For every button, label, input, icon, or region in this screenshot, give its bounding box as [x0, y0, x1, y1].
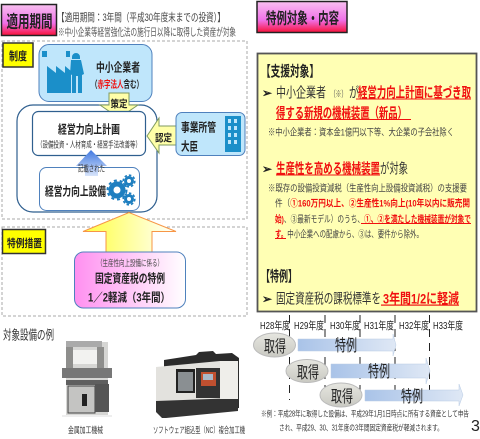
icon: gears: [108, 175, 135, 205]
row 1: acquisition and special case: 取得: [264, 337, 286, 356]
heading: application period: [2, 4, 56, 36]
text block: productivity machinery: ➢: [262, 162, 273, 176]
year labels: H31年度: [364, 319, 394, 332]
text block: target SMEs: （※）: [330, 89, 347, 99]
row 1: acquisition and special case: [254, 333, 396, 357]
arrow: certified: 認定: [155, 132, 172, 144]
outer frame: plan and equipment: [17, 105, 157, 212]
label: special measures: 特例措置: [7, 236, 42, 250]
caption: metal working machine: 金属加工機械: [68, 425, 103, 435]
text block: productivity machinery: が対象: [380, 160, 408, 176]
box: management improvement plan: [32, 112, 146, 156]
heading: eligibility and content: [257, 2, 347, 32]
text block: period description: ※中小企業等経営強化法の施行日以降に取得した資産が対象: [58, 26, 236, 38]
box: equipment: [40, 168, 140, 210]
text block: target SMEs: 中小企業者: [276, 84, 326, 100]
image: NC combined machine: [156, 351, 239, 418]
text block: productivity machinery: 生産性を高める機械装置: [276, 160, 380, 176]
arrow: certified: [147, 118, 176, 153]
box: fixed asset tax special treatment: 1／2軽減（3年間）: [88, 290, 170, 304]
box: competent minister: 事業所管: [181, 120, 216, 134]
heading: example equipment: 対象設備の例: [3, 328, 54, 342]
arrow: described in plan: [76, 150, 107, 176]
text block: tax reduction: ➢: [262, 292, 273, 306]
box: equipment: 経営力向上設備: [45, 184, 106, 198]
panel: support target: [258, 54, 476, 312]
year labels: H30年度: [330, 319, 360, 332]
footnote: timeline example: [261, 408, 469, 432]
panel: special measures: [2, 212, 247, 316]
timeline: [254, 315, 463, 407]
arrow: formulate: 策定: [110, 98, 128, 110]
row 1: acquisition and special case: 特例: [335, 336, 357, 355]
year labels: H29年度: [294, 319, 324, 332]
box: management improvement plan: （設備投資・人材育成・経営手法改善等）: [37, 140, 141, 150]
heading: special case: 【特例】: [261, 268, 297, 286]
row 2: acquisition and special case: 取得: [297, 363, 319, 382]
label: system: 制度: [9, 49, 27, 63]
text block: period description: 【適用期間：3年間（平成30年度末までの投資）】: [57, 10, 225, 24]
box: fixed asset tax special treatment: 固定資産税の特例: [95, 270, 165, 286]
year labels: H28年度: [260, 319, 290, 332]
box: fixed asset tax special treatment: [74, 252, 186, 308]
heading: support target: 【支援対象】: [261, 62, 319, 80]
label: special measures: [2, 230, 46, 254]
row 3: acquisition and special case: 取得: [331, 387, 353, 406]
box: fixed asset tax special treatment: （生産性向上設備に係る）: [97, 258, 163, 268]
text block: tax reduction: 3年間1/2に軽減: [383, 290, 459, 306]
panel: system: [2, 41, 247, 219]
text block: target SMEs: ➢: [262, 86, 273, 100]
icon: factory and worker: [42, 51, 84, 93]
text block: productivity machinery: [262, 160, 471, 240]
text block: period description: [57, 10, 236, 38]
row 2: acquisition and special case: [286, 358, 430, 384]
arrow: up to equipment: [83, 212, 176, 253]
year labels: H32年度: [399, 319, 429, 332]
box: small and medium enterprises: （赤字法人含む）: [91, 78, 143, 91]
box: management improvement plan: 経営力向上計画: [58, 122, 120, 136]
icon: office building: [225, 116, 241, 152]
page number: 3: [471, 418, 480, 435]
heading: eligibility and content: 特例対象・内容: [266, 8, 339, 28]
year labels: [260, 319, 463, 332]
box: small and medium enterprises: [39, 44, 152, 102]
label: system: [3, 43, 33, 67]
year labels: H33年度: [433, 319, 463, 332]
box: small and medium enterprises: 中小企業者: [96, 60, 140, 74]
image: metal working machine: [62, 341, 112, 417]
box: competent minister: 大臣: [181, 138, 198, 154]
caption: NC combined machine: ソフトウェア組込型（NC）複合加工機: [153, 425, 245, 435]
box: competent minister: [176, 112, 245, 156]
heading: application period: 適用期間: [6, 12, 52, 32]
text block: target SMEs: 得する新規の機械装置（新品）: [276, 105, 407, 121]
row 3: acquisition and special case: 特例: [401, 387, 423, 406]
row 2: acquisition and special case: 特例: [368, 362, 390, 381]
text block: target SMEs: [262, 84, 471, 138]
text block: target SMEs: が: [349, 84, 359, 100]
text block: tax reduction: 固定資産税の課税標準を: [276, 290, 381, 306]
arrow: formulate: [100, 93, 138, 118]
arrow: described in plan: 記載された: [78, 164, 105, 174]
row 3: acquisition and special case: [320, 383, 463, 407]
